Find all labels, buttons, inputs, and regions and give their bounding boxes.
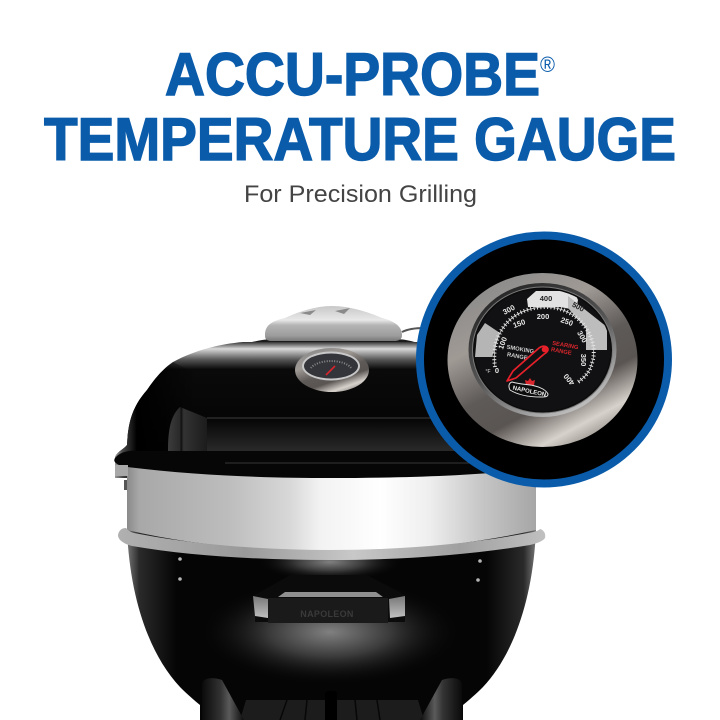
range labels: RANGE <box>550 347 572 357</box>
dial numbers: 350 <box>579 354 588 366</box>
gauge face <box>475 291 607 398</box>
lid dome <box>115 342 547 478</box>
range labels: RANGE <box>506 352 528 362</box>
legs <box>202 678 462 720</box>
dial scale <box>494 307 594 382</box>
napoleon logo: NAPOLEON <box>512 386 546 398</box>
range labels <box>506 341 579 362</box>
gauge bezel <box>448 273 638 447</box>
dial numbers: 150 <box>512 317 527 330</box>
dial numbers: 100 <box>496 336 509 351</box>
range labels: SEARING <box>552 341 579 351</box>
needle <box>507 346 548 381</box>
grill illustration <box>114 306 547 720</box>
handle: NAPOLEON <box>300 609 354 619</box>
subtitle: For Precision Grilling <box>244 181 477 208</box>
lid panel <box>207 418 540 453</box>
dial numbers <box>485 294 589 387</box>
dial numbers: 400 <box>562 372 577 387</box>
stainless band <box>127 467 536 551</box>
dial numbers: 400 <box>540 294 552 303</box>
title: ® <box>540 52 555 77</box>
title: ACCU-PROBE <box>165 41 540 108</box>
bowl rivets <box>178 557 482 582</box>
dial reflections <box>475 323 500 357</box>
lid vent knob <box>252 306 424 350</box>
zoom callout circle <box>420 236 668 484</box>
dial numbers: 300 <box>575 329 589 344</box>
bowl <box>127 530 536 720</box>
dial numbers: 500 <box>571 300 586 314</box>
range labels: SMOKING <box>506 345 535 355</box>
dial numbers: °F <box>485 369 491 375</box>
handle <box>253 575 405 623</box>
dial numbers: 300 <box>501 303 516 317</box>
dial numbers: 250 <box>559 315 574 328</box>
small gauge on lid <box>295 348 369 392</box>
title: TEMPERATURE GAUGE <box>44 106 676 173</box>
ring <box>118 528 545 560</box>
dial numbers: 200 <box>537 312 549 321</box>
lid rim <box>114 451 547 478</box>
dial numbers: 0 <box>495 366 499 375</box>
title <box>44 41 676 173</box>
side hinge <box>115 465 128 490</box>
